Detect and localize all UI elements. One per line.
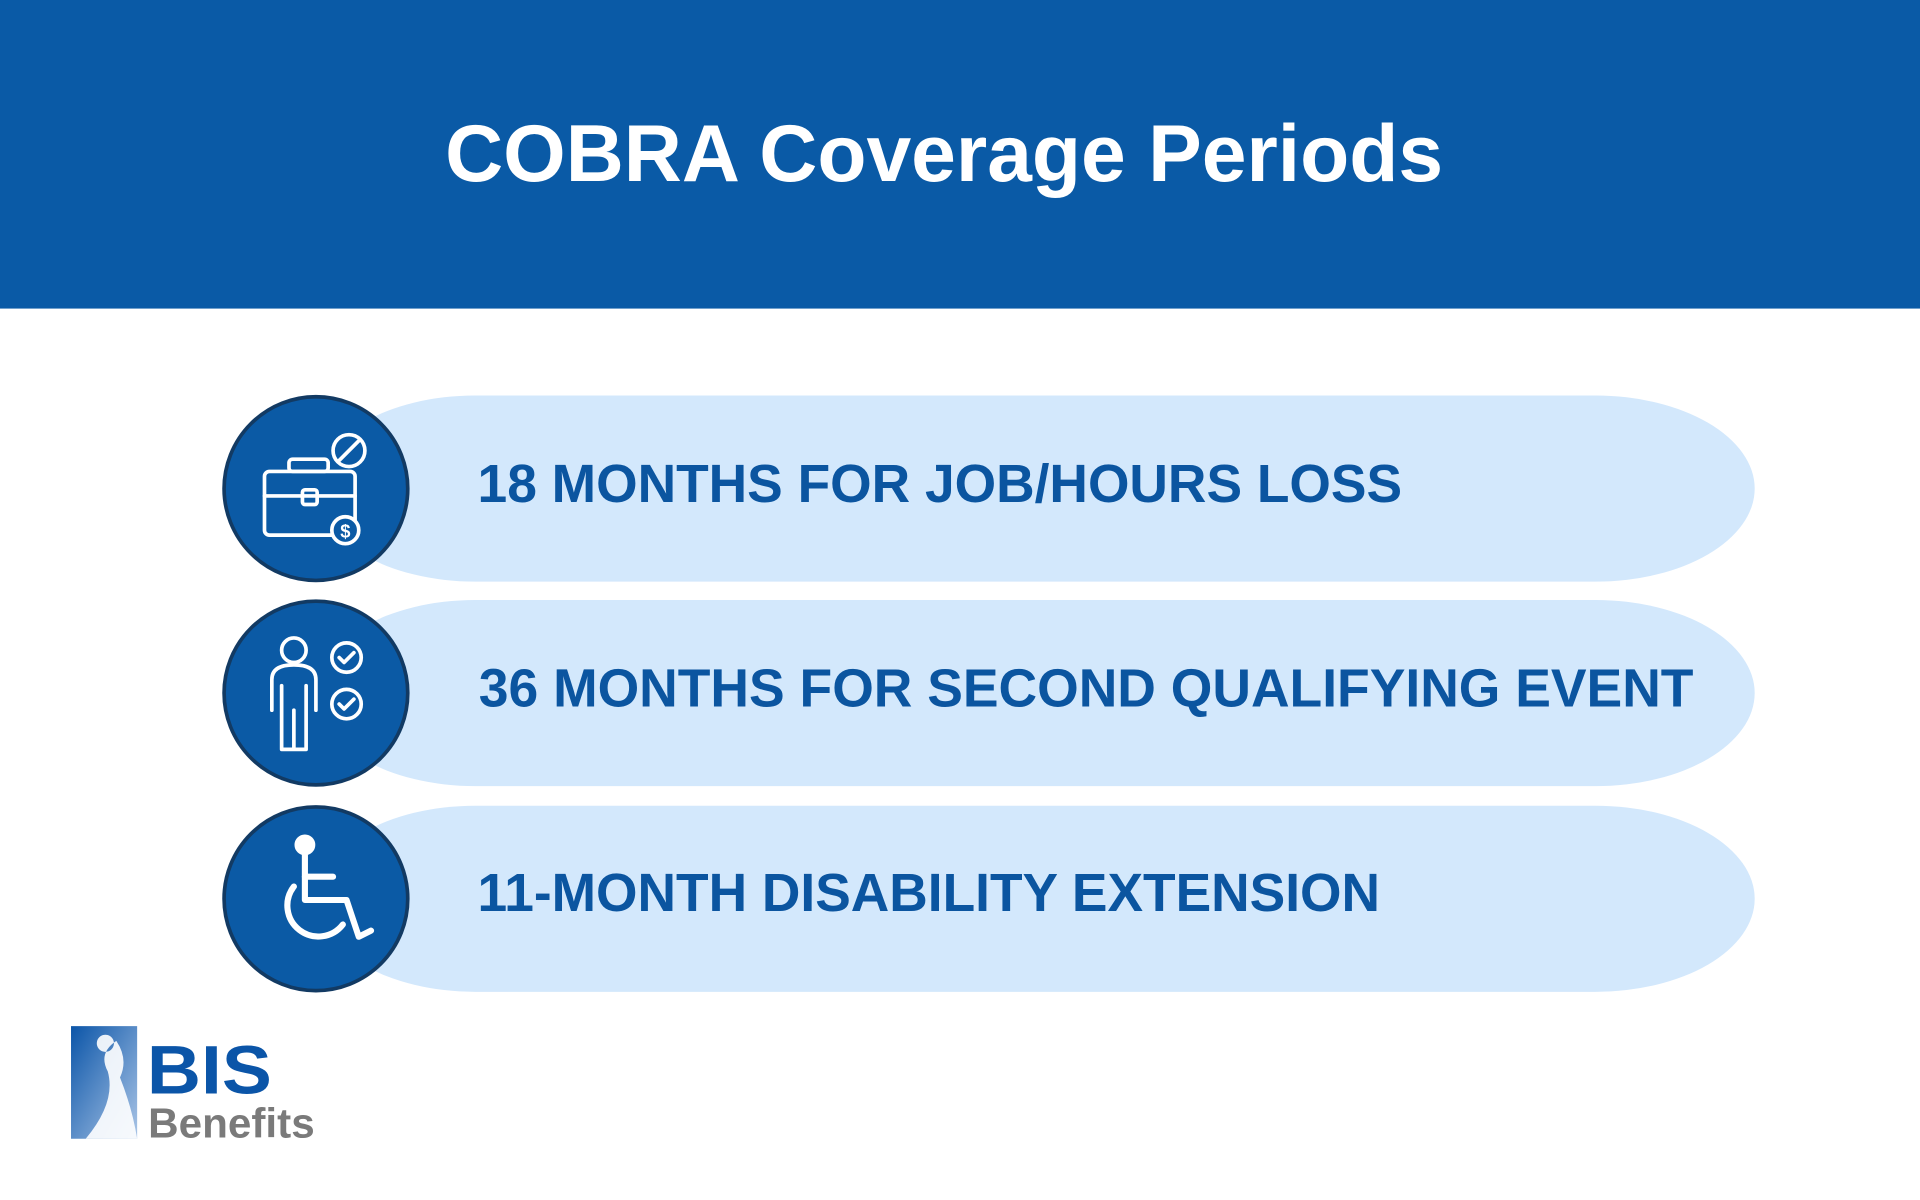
icon: wheelchair [287,838,371,937]
logo: BIS Benefits: Benefits [148,1100,315,1147]
logo: BIS Benefits: BIS [147,1031,272,1108]
label: 11-MONTH DISABILITY EXTENSION [478,863,1380,923]
title: COBRA Coverage Periods [445,109,1443,199]
row 1: job/hours loss [224,396,1755,582]
label: 36 MONTHS FOR SECOND QUALIFYING EVENT [479,659,1694,719]
icon: person with checks [272,638,361,749]
row 3: disability extension [224,806,1755,992]
logo: BIS Benefits [71,1026,315,1147]
icon: briefcase: $ [340,521,350,542]
label: 18 MONTHS FOR JOB/HOURS LOSS [478,454,1402,514]
icon: briefcase [264,435,365,544]
row 2: second qualifying event [224,600,1755,786]
header banner [0,0,1920,309]
